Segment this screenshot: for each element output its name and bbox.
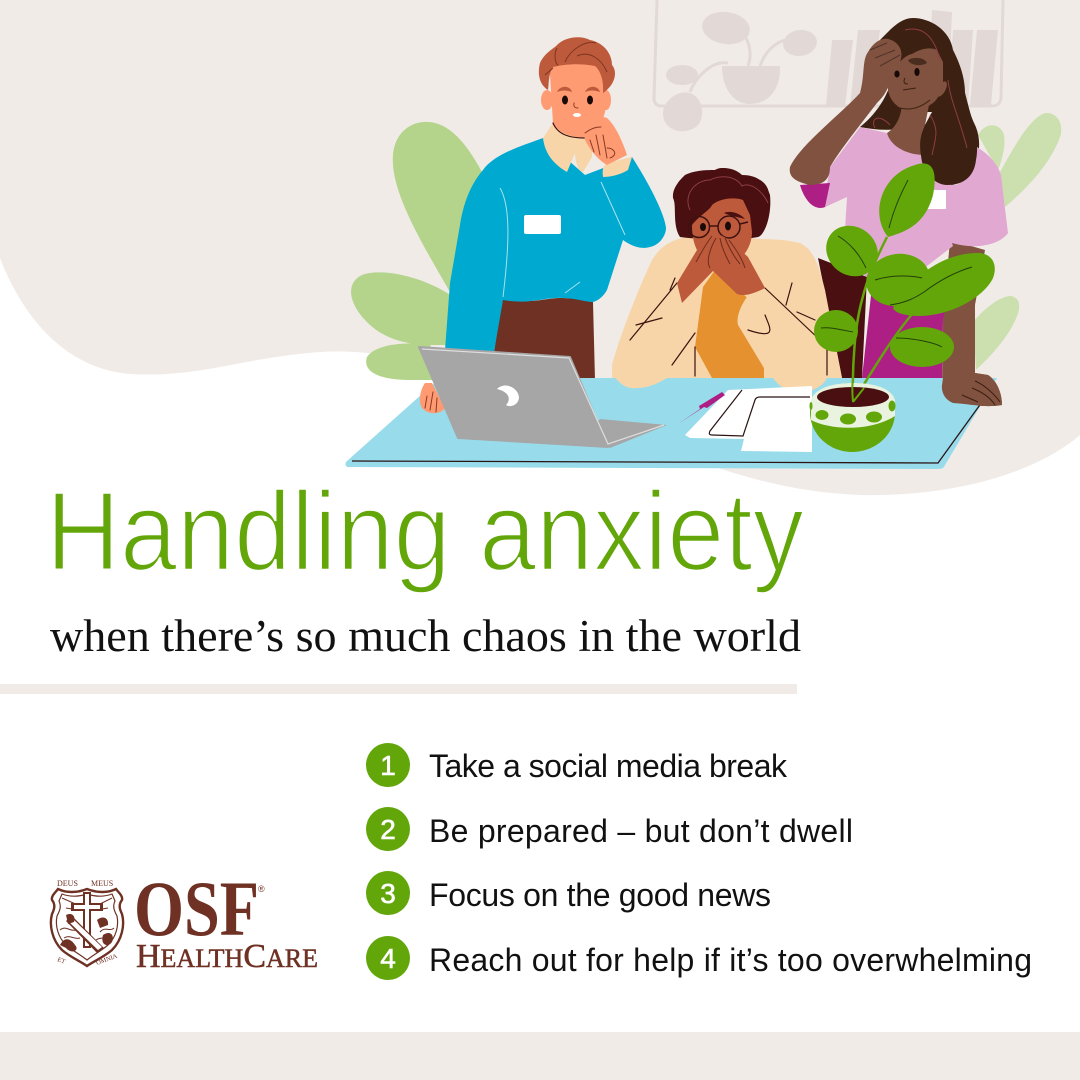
sweater creases <box>500 182 625 297</box>
woman standing <box>790 18 1008 406</box>
leaves <box>879 163 935 237</box>
table edge line <box>352 402 982 463</box>
right forearm <box>738 288 828 393</box>
stems <box>853 237 913 402</box>
wall shelf with plant and books <box>654 0 1003 131</box>
tip 2: 2 <box>380 814 396 845</box>
leaf veins <box>821 180 972 347</box>
background blob <box>0 0 1080 495</box>
man collar <box>543 123 592 172</box>
hair <box>673 168 770 239</box>
background leaves left <box>351 122 482 380</box>
footer band <box>0 1032 1080 1080</box>
pen <box>678 392 725 424</box>
woman sleeve cuff <box>800 183 830 208</box>
woman hair over shoulder <box>920 93 977 185</box>
tip 1: 1 <box>380 750 396 781</box>
man cuff <box>603 157 632 177</box>
woman lower arm <box>942 240 1002 406</box>
man ear <box>541 90 553 110</box>
man face <box>549 58 606 137</box>
title: Handling anxiety <box>46 469 804 594</box>
man standing <box>445 37 666 380</box>
laptop <box>419 347 667 448</box>
woman shirt <box>823 127 1008 292</box>
shield crest: ET <box>56 956 66 966</box>
tip 3: Focus on the good news <box>429 877 771 913</box>
pot dots <box>810 400 896 424</box>
tip 4: Reach out for help if it’s too overwhelming <box>429 942 1032 978</box>
woman hair highlights <box>873 29 967 155</box>
seated person <box>612 168 842 393</box>
tip 2: Be prepared – but don’t dwell <box>429 813 853 849</box>
tip 3 <box>366 871 771 915</box>
man hand on table <box>420 383 445 413</box>
hands over mouth <box>677 233 765 303</box>
glasses <box>688 216 748 238</box>
woman hair back <box>860 18 979 185</box>
shirt <box>695 270 764 378</box>
table <box>346 378 997 469</box>
jacket folds <box>630 278 827 376</box>
woman neck <box>887 100 930 157</box>
pot <box>810 383 895 452</box>
tip 1 <box>366 743 788 787</box>
woman face <box>888 48 947 110</box>
man fist <box>583 117 627 165</box>
woman hand above table <box>942 373 1002 406</box>
laptop logo <box>497 385 519 406</box>
woman name tag <box>925 190 946 209</box>
woman raised arm and hand <box>790 39 901 185</box>
tip 4: 4 <box>380 943 396 974</box>
shield crest <box>51 879 123 967</box>
man hair <box>539 37 615 93</box>
man eyes and eyebrows <box>557 87 600 92</box>
jacket elbows above table <box>612 365 827 393</box>
jacket <box>612 237 842 393</box>
tip 1: Take a social media break <box>429 748 788 784</box>
shield crest: DEUS <box>57 879 78 888</box>
man name tag <box>524 215 561 234</box>
papers and pen <box>678 386 812 452</box>
shield crest: OMNIA <box>95 953 119 967</box>
wordmark HealthCare: HEALTHCARE <box>136 938 318 975</box>
man trousers <box>490 298 595 380</box>
registered mark: ® <box>258 884 265 894</box>
man sweater <box>445 138 666 352</box>
divider <box>0 684 797 694</box>
tip 3: 3 <box>380 878 396 909</box>
subtitle: when there’s so much chaos in the world <box>50 611 801 661</box>
chair <box>818 258 867 378</box>
wordmark OSF: OSF <box>134 865 259 952</box>
woman trousers <box>862 277 950 378</box>
face <box>692 198 752 262</box>
OSF HealthCare logo <box>51 865 318 975</box>
potted plant <box>810 163 995 452</box>
shield crest: MEUS <box>91 879 113 888</box>
background leaves right <box>973 113 1061 370</box>
